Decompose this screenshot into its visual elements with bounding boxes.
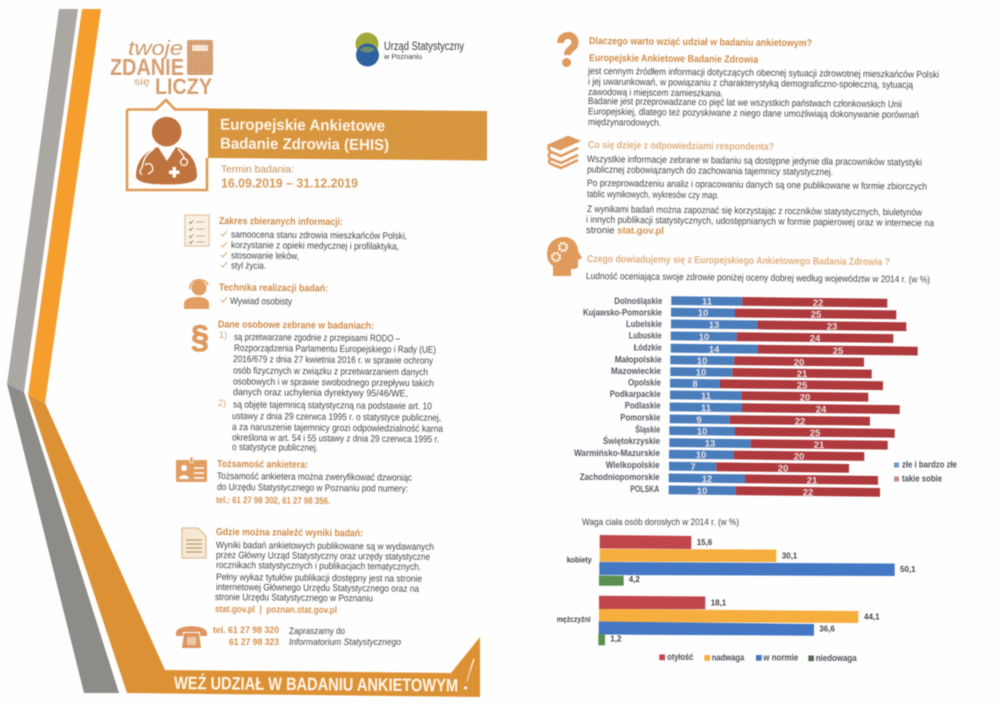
row: Wielkopolskie: Wielkopolskie	[606, 460, 660, 471]
row: Mazowieckie	[611, 366, 872, 380]
section: dlaczego warto	[560, 35, 939, 129]
section: dane osobowe: określona w art. 54 i 55 ustawy z dnia 29 czerwca 1995 r.	[232, 433, 439, 445]
section: co się dzieje z odpowiedziami: Wszystkie informacje zebrane w badaniu są dostępne jedynie dla pracowników statystyki	[587, 154, 922, 169]
group: mężczyźni: 1,2	[610, 634, 622, 643]
row: Łódzkie: 14	[709, 344, 720, 356]
section: zakres zbieranych informacji: Zakres zbieranych informacji:	[219, 216, 343, 228]
section: dane osobowe: 2016/679 z dnia 27 kwietnia 2016 r. w sprawie ochrony	[233, 354, 433, 367]
section: gdzie można znaleźć wyniki badań: Pełny wykaz tytułów publikacji dostępny jest na stronie	[216, 572, 422, 585]
panel: header with doctor icon: Badanie Zdrowia (EHIS)	[220, 136, 389, 154]
row: POLSKA: 22	[803, 488, 813, 498]
row: Zachodniopomorskie	[580, 472, 878, 486]
title bar	[208, 108, 487, 160]
row: Podlaskie: 11	[701, 403, 712, 414]
section: telefon i zaproszenie: Informatorium Statystycznego	[289, 637, 401, 648]
section: dlaczego warto: Europejskie Ankietowe Badanie Zdrowia	[589, 53, 758, 66]
row: Zachodniopomorskie: 21	[807, 476, 818, 486]
row: Dolnośląskie: 22	[813, 298, 823, 309]
legend: otyłość	[667, 652, 693, 663]
row: Śląskie: 25	[810, 428, 821, 439]
section: dane osobowe: są objęte tajemnicą statystyczną na podstawie art. 10	[233, 400, 432, 412]
row: Małopolskie: 10	[697, 356, 707, 367]
section: gdzie można znaleźć wyniki badań: internetowej Głównego Urzędu Statystycznego oraz na	[216, 582, 420, 595]
section: tożsamość ankietera: tel.: 61 27 98 302, 61 27 98 356.	[216, 495, 330, 507]
logo: twoje zdanie się liczy: się	[134, 77, 151, 88]
section: co się dzieje z odpowiedziami: i innych publikacji statystycznych, udostępnianych w formie papierowej oraz w internecie na	[586, 215, 935, 229]
group: mężczyźni: 18,1	[711, 598, 727, 607]
row: Wielkopolskie: 7	[690, 462, 696, 473]
section: dlaczego warto: Dlaczego warto wziąć udział w badaniu ankietowym?	[589, 36, 812, 49]
chart title: Waga ciała osób dorosłych w 2014 r. (w %)	[582, 517, 739, 528]
legend	[659, 652, 857, 664]
section: gdzie można znaleźć wyniki badań: Wyniki badań ankietowych publikowane są w wydawanych	[216, 540, 434, 553]
section: dane osobowe: ustawy z dnia 29 czerwca 1995 r. o statystyce publicznej,	[232, 411, 441, 424]
group: kobiety: kobiety	[567, 556, 592, 565]
row: Małopolskie	[615, 354, 864, 368]
section: dane osobowe: 2)	[218, 398, 226, 408]
row: Kujawsko-Pomorskie: 25	[811, 310, 822, 320]
section: telefon i zaproszenie: 61 27 98 323	[229, 637, 279, 648]
section: dlaczego warto: Badanie jest przeprowadzane co pięć lat we wszystkich państwach członkowskich Unii	[588, 96, 902, 110]
legend: nadwaga	[712, 652, 745, 664]
row: Łódzkie	[634, 342, 918, 357]
row: Dolnośląskie: Dolnośląskie	[614, 296, 662, 307]
row: Podkarpackie: 20	[800, 392, 810, 404]
section: dlaczego warto: zawodową i miejscem zamieszkania.	[588, 87, 723, 99]
row: Podkarpackie: 11	[701, 391, 712, 402]
logo: Urząd Statystyczny w Poznaniu: w Poznaniu	[383, 52, 422, 61]
group: kobiety: 50,1	[900, 565, 916, 574]
section: gdzie można znaleźć wyniki badań: Gdzie można znaleźć wyniki badań:	[216, 527, 363, 539]
icon: checklist	[185, 215, 209, 246]
row: Mazowieckie: 21	[797, 369, 808, 380]
panel: header with doctor icon: 16.09.2019 – 31.12.2019	[221, 176, 358, 191]
section: co się dzieje z odpowiedziami	[549, 137, 935, 237]
logo: twoje zdanie się liczy: LICZY	[155, 74, 212, 99]
section: telefon i zaproszenie: tel. 61 27 98 320	[213, 625, 279, 636]
row: Łódzkie: 25	[833, 346, 844, 357]
row: Świętokrzyskie	[603, 435, 888, 451]
row: Opolskie: 8	[692, 379, 698, 390]
row: Pomorskie: 9	[696, 415, 702, 426]
legend: złe i bardzo złe	[902, 460, 957, 470]
row: Warmińsko-Mazurskie: 20	[794, 452, 804, 462]
section: gdzie można znaleźć wyniki badań: rocznikach statystycznych i publikacjach tematycznych.	[216, 560, 421, 573]
row: Zachodniopomorskie: Zachodniopomorskie	[580, 472, 660, 483]
row: Świętokrzyskie: 21	[814, 440, 825, 451]
icon: doctor	[136, 117, 197, 184]
section: co się dzieje z odpowiedziami: tablic wynikowych, wykresów czy map.	[587, 189, 719, 201]
section: dane osobowe: osób fizycznych w związku z przetwarzaniem danych	[233, 366, 428, 378]
icon frame with pointer	[127, 100, 208, 190]
survey dates: Termin badania:	[221, 164, 294, 176]
row: Łódzkie: Łódzkie	[634, 342, 662, 354]
chart: self-rated health by voivodeship	[574, 296, 957, 498]
row: Mazowieckie: 10	[696, 368, 706, 378]
row: Kujawsko-Pomorskie	[583, 308, 896, 320]
row: Pomorskie	[620, 412, 870, 428]
row: Świętokrzyskie: 13	[705, 438, 715, 450]
row: Podlaskie: 24	[816, 404, 827, 416]
section: dane osobowe: danych oraz uchylenia dyrektywy 95/46/WE,	[233, 387, 408, 400]
section: dlaczego warto: i jej uwarunkowań, w powiązaniu z charakterystyką demograficzno-społeczną, sytuacją	[588, 77, 914, 91]
legend: niedowaga	[816, 653, 857, 664]
row: Wielkopolskie	[606, 460, 849, 474]
icon: exclamation mark	[464, 659, 474, 690]
row: Warmińsko-Mazurskie	[574, 448, 864, 462]
section: dane osobowe: o statystyce publicznej.	[232, 442, 318, 454]
row: Lubuskie	[629, 330, 893, 344]
section: dane osobowe: są przetwarzane zgodnie z przepisami RODO –	[234, 332, 401, 344]
group: kobiety: 4,2	[629, 575, 640, 584]
icon: id card	[176, 457, 207, 482]
row: Kujawsko-Pomorskie: Kujawsko-Pomorskie	[583, 308, 662, 318]
section: dlaczego warto: międzynarodowych.	[588, 117, 661, 129]
row: Podlaskie	[625, 400, 900, 416]
row: Warmińsko-Mazurskie: Warmińsko-Mazurskie	[574, 448, 660, 459]
section: dane osobowe: a za naruszenie tajemnicy grozi odpowiedzialność karna	[232, 422, 444, 435]
section: czego dowiadujemy się: Czego dowiadujemy się z Europejskiego Ankietowego Badania Zdrowia ?	[587, 254, 890, 268]
row: Kujawsko-Pomorskie: 10	[698, 308, 708, 319]
row: Śląskie: 10	[697, 426, 707, 438]
row: Podkarpackie	[610, 389, 868, 404]
logo: twoje zdanie się liczy: twoje	[128, 38, 183, 60]
logo: twoje zdanie się liczy: ZDANIE	[110, 54, 184, 80]
group: kobiety: 15,6	[697, 538, 713, 547]
section: zakres zbieranych informacji: korzystanie z opieki medycznej i profilaktyka,	[231, 240, 399, 252]
row: Lubuskie: 24	[810, 334, 821, 344]
logo: twoje zdanie się liczy	[110, 38, 213, 99]
section: telefon i zaproszenie: Zapraszamy do	[289, 626, 345, 637]
section: zakres zbieranych informacji	[185, 215, 407, 272]
row: POLSKA: 10	[697, 486, 707, 497]
row: Śląskie: Śląskie	[635, 424, 660, 436]
section: dane osobowe: Rozporządzenia Parlamentu Europejskiego i Rady (UE)	[234, 343, 436, 356]
row: Lubelskie	[626, 319, 906, 332]
section: co się dzieje z odpowiedziami: stronie stat.gov.pl	[586, 225, 664, 237]
row: Śląskie	[635, 424, 895, 439]
group: kobiety: 30,1	[782, 552, 798, 561]
section: technika realizacji badań	[184, 280, 328, 309]
section: czego dowiadujemy się	[547, 237, 930, 286]
row: Opolskie: 25	[797, 380, 808, 392]
section: co się dzieje z odpowiedziami: publicznej zobowiązanych do zachowania tajemnicy statystycznej.	[587, 165, 833, 178]
row: Dolnośląskie	[614, 296, 887, 309]
section: tożsamość ankietera	[176, 457, 412, 507]
chart: body weight of adults	[557, 517, 916, 664]
row: Podlaskie: Podlaskie	[625, 400, 661, 412]
icon: document	[182, 528, 206, 558]
section: dane osobowe: Dane osobowe zebrane w badaniach:	[218, 320, 374, 332]
section: tożsamość ankietera: Tożsamość ankietera:	[217, 459, 308, 471]
section: technika realizacji badań: Wywiad osobisty	[230, 296, 292, 308]
row: Mazowieckie: Mazowieckie	[611, 366, 661, 377]
group: mężczyźni: 36,6	[819, 625, 835, 634]
row: Małopolskie: 20	[794, 358, 804, 368]
legend: w normie	[762, 652, 798, 664]
section: co się dzieje z odpowiedziami: Co się dzieje z odpowiedziami respondenta?	[588, 140, 774, 153]
section: dlaczego warto: jest cennym źródłem informacji dotyczących obecnej sytuacji zdrowotnej mieszkańców Polski	[587, 66, 939, 81]
icon: question mark	[560, 35, 575, 67]
section: gdzie można znaleźć wyniki badań: stat.gov.pl | poznan.stat.gov.pl	[215, 604, 337, 616]
section: zakres zbieranych informacji: samoocena stanu zdrowia mieszkańców Polski,	[231, 230, 407, 242]
section: gdzie można znaleźć wyniki badań: przez Główny Urząd Statystyczny oraz urzędy statystyczne	[216, 550, 430, 563]
row: Pomorskie: Pomorskie	[620, 412, 660, 424]
section: tożsamość ankietera: do Urzędu Statystycznego w Poznaniu pod numery:	[217, 482, 408, 495]
banner text: WEŹ UDZIAŁ W BADANIU ANKIETOWYM	[174, 672, 458, 695]
row: Świętokrzyskie: Świętokrzyskie	[603, 435, 660, 447]
section: tożsamość ankietera: Tożsamość ankietera można zweryfikować dzwoniąc	[217, 471, 412, 484]
icon: telephone	[176, 626, 207, 648]
section: technika realizacji badań: Technika realizacji badań:	[219, 283, 328, 294]
row: Lubuskie: Lubuskie	[629, 330, 662, 342]
section: telefon i zaproszenie	[176, 625, 401, 648]
section: dane osobowe: osobowych i w sprawie swobodnego przepływu takich	[233, 377, 434, 389]
row: POLSKA: POLSKA	[630, 484, 659, 495]
section: dane osobowe: 1)	[219, 330, 227, 340]
section: zakres zbieranych informacji: stosowanie leków,	[231, 251, 299, 262]
row: Lubelskie: 13	[709, 320, 719, 331]
row: Wielkopolskie: 20	[778, 464, 788, 474]
row: Warmińsko-Mazurskie: 10	[696, 450, 706, 461]
section: co się dzieje z odpowiedziami: Po przeprowadzeniu analiz i opracowaniu danych są one publikowane w formie zbiorczych	[587, 178, 927, 193]
row: Lubelskie: Lubelskie	[626, 319, 662, 330]
row: Lubelskie: 23	[827, 322, 837, 332]
legend	[894, 460, 957, 484]
logo: Urząd Statystyczny w Poznaniu: Urząd Statystyczny	[384, 41, 464, 53]
group: mężczyźni: 44,1	[864, 612, 880, 621]
logo: Urząd Statystyczny w Poznaniu	[356, 32, 464, 66]
title: Europejskie Ankietowe	[220, 117, 385, 135]
row: POLSKA	[630, 484, 880, 498]
group: mężczyźni	[557, 596, 880, 645]
row: Małopolskie: Małopolskie	[615, 354, 662, 366]
panel: header with doctor icon	[127, 100, 487, 191]
section: zakres zbieranych informacji: styl życia.	[231, 261, 266, 272]
decorative stripes and bottom banner	[7, 9, 480, 697]
group: mężczyźni: mężczyźni	[557, 615, 591, 624]
section: czego dowiadujemy się: Ludność oceniająca swoje zdrowie poniżej oceny dobrej według województw w 2014 r. (w %)	[586, 271, 930, 286]
group: kobiety	[567, 535, 916, 586]
section: gdzie można znaleźć wyniki badań	[182, 527, 434, 616]
row: Zachodniopomorskie: 12	[702, 474, 712, 485]
section: co się dzieje z odpowiedziami: Z wynikami badań można zapoznać się korzystając z roczników statystycznych, biuletynów	[587, 204, 922, 219]
icon: interviewer with headset	[184, 280, 209, 309]
icon: head with gears	[547, 237, 582, 276]
icon: books	[549, 137, 578, 168]
row: Lubuskie: 10	[699, 332, 709, 343]
row: Podkarpackie: Podkarpackie	[610, 389, 661, 400]
section: dlaczego warto: Europejskiej, dlatego też pozyskiwane z niego dane umożliwiają dokonywanie porównań	[588, 107, 919, 121]
legend: takie sobie	[902, 474, 942, 484]
row: Dolnośląskie: 11	[702, 296, 713, 308]
section: dane osobowe	[191, 319, 444, 454]
section: gdzie można znaleźć wyniki badań: stronie Urzędu Statystycznego w Poznaniu	[215, 592, 373, 604]
row: Opolskie: Opolskie	[628, 378, 661, 388]
row: Pomorskie: 22	[795, 416, 805, 428]
row: Opolskie	[628, 378, 883, 392]
icon: paragraph sign: §	[191, 319, 209, 355]
